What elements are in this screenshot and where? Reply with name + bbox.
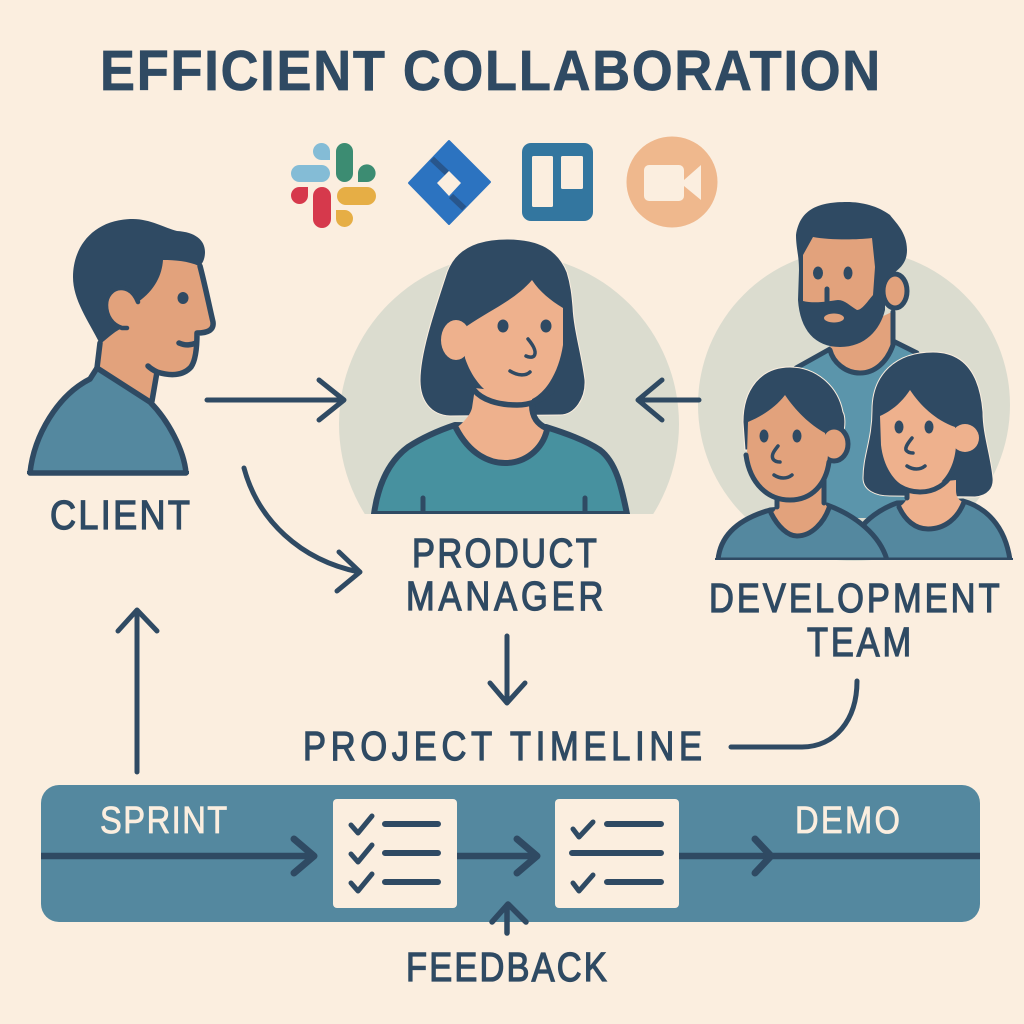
man eyes [813, 266, 823, 280]
woman hair [863, 352, 993, 497]
man ear [883, 274, 907, 308]
boy hair [743, 367, 845, 450]
woman eyes [894, 420, 904, 434]
circle backdrop: product manager [339, 263, 679, 514]
man nose [824, 289, 830, 302]
arrow: team to product manager [638, 380, 699, 420]
label: feedback: FEEDBACK [406, 945, 607, 991]
arrow: feedback [492, 904, 526, 933]
label: product manager: MANAGER [406, 574, 603, 620]
pm face [464, 280, 563, 403]
circle backdrop: development team [698, 249, 1010, 561]
tool icons row [291, 136, 718, 228]
label: demo: DEMO [795, 799, 900, 842]
label: sprint: SPRINT [100, 799, 227, 842]
boy eyes [760, 430, 768, 442]
arrow: client to product manager [207, 380, 344, 420]
arrow: timeline up to client [118, 610, 157, 772]
client body [30, 368, 186, 473]
pm eyes [498, 320, 508, 332]
figure: product manager [374, 239, 627, 514]
boy body [718, 505, 887, 560]
woman body [863, 501, 1010, 560]
client eye [178, 292, 188, 304]
figure: development team [715, 202, 1013, 561]
pm body [374, 425, 627, 514]
man mouth [824, 314, 844, 322]
pm neck [456, 388, 546, 462]
panel: sprint timeline bar [41, 785, 980, 922]
arrow: second checklist to demo [679, 839, 980, 873]
boy nose [772, 446, 780, 462]
boy neck [771, 475, 828, 535]
man neck [830, 312, 892, 372]
label: product manager [406, 531, 603, 620]
client profile line [148, 266, 213, 375]
boy ear [820, 427, 848, 461]
woman neck [899, 480, 963, 528]
label: development team [709, 576, 1000, 666]
label: development team: DEVELOPMENT [709, 576, 1000, 622]
label: project timeline: PROJECT TIMELINE [303, 724, 702, 770]
pm mouth [510, 371, 530, 375]
pm hair [420, 239, 585, 416]
arrow: product manager to timeline [490, 636, 525, 703]
title: EFFICIENT COLLABORATION [100, 38, 880, 102]
man body [801, 345, 914, 518]
man hair and beard [796, 202, 907, 347]
label: development team: TEAM [807, 620, 911, 666]
arrow: sprint to first checklist [41, 839, 314, 873]
client neck and face [97, 245, 213, 402]
woman nose [906, 438, 913, 453]
arrow: between checklists [457, 839, 537, 873]
checklist card 2 [555, 799, 679, 908]
woman mouth [907, 466, 925, 469]
man face [803, 237, 875, 310]
connector: team to timeline [731, 681, 857, 747]
pm arm lines [423, 498, 585, 514]
woman face [880, 390, 956, 491]
pm nose [526, 339, 535, 357]
figure: client [27, 219, 213, 474]
checklist card 1 [333, 799, 457, 908]
label: product manager: PRODUCT [412, 531, 597, 577]
woman ear [955, 424, 979, 452]
pm ear [441, 320, 467, 360]
boy face [747, 395, 828, 498]
icon: video call [626, 136, 718, 228]
pm collar [456, 405, 547, 463]
icon: jira [409, 141, 490, 224]
icon: trello [522, 143, 593, 221]
client hair [73, 219, 205, 344]
arrow: client curve to product manager [244, 468, 360, 591]
label: client: CLIENT [50, 493, 190, 539]
client ear [106, 288, 138, 328]
icon: slack [291, 143, 376, 228]
boy mouth [774, 475, 792, 478]
